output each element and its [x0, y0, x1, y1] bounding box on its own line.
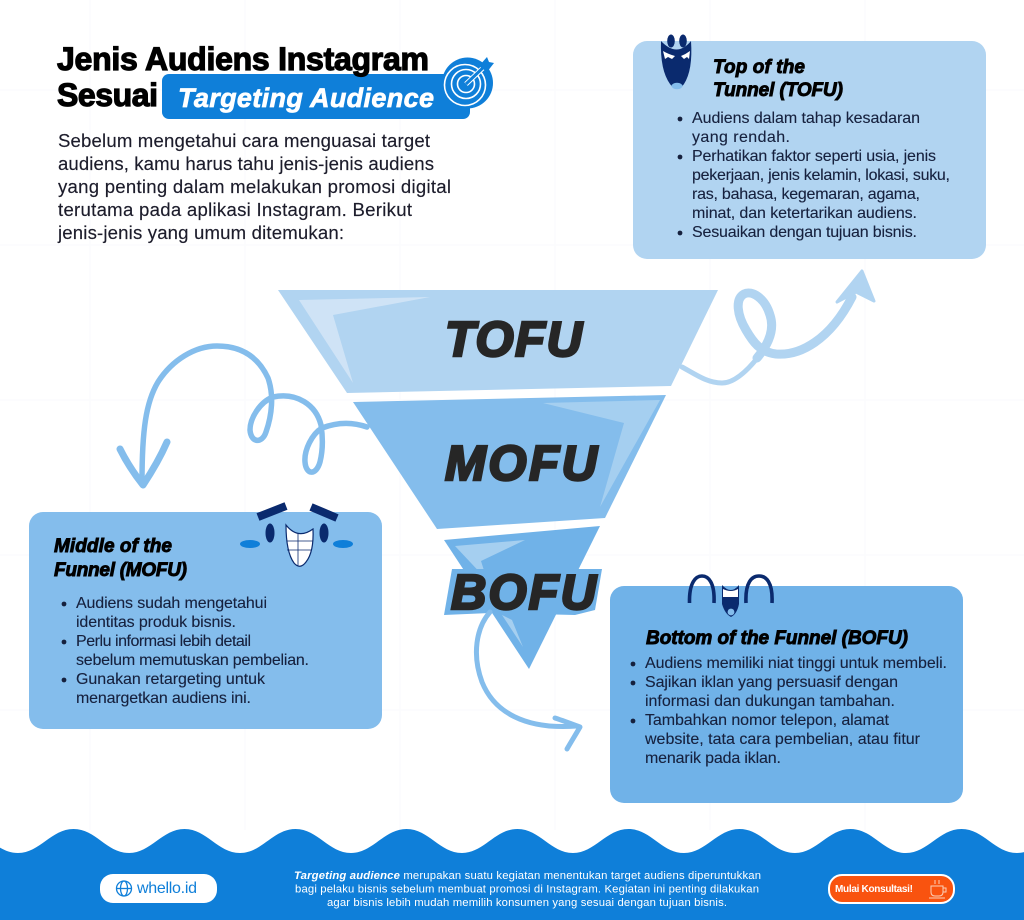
footer wave band: [0, 829, 1024, 920]
bullet list: TOFU: minat, dan ketertarikan audiens.: [692, 205, 917, 222]
bullet list: MOFU: Perlu informasi lebih detail: [76, 633, 251, 650]
bullet list: BOFU: website, tata cara pembelian, atau fitur: [644, 731, 921, 748]
title: Targeting Audience: [178, 83, 434, 113]
arrow: funnel to TOFU panel: [682, 271, 874, 383]
bullet list: MOFU: Gunakan retargeting untuk: [76, 671, 266, 688]
arrow: BOFU to BOFU panel: [476, 612, 580, 749]
bullet list: BOFU: informasi dan dukungan tambahan.: [645, 693, 895, 710]
intro text: audiens, kamu harus tahu jenis-jenis audiens: [58, 153, 434, 174]
bullet list: TOFU: Perhatikan faktor seperti usia, jenis: [692, 148, 936, 165]
icon: target with arrow: [442, 57, 494, 108]
bullet list: TOFU: yang rendah.: [692, 129, 790, 146]
intro text: yang penting dalam melakukan promosi digital: [58, 176, 451, 197]
arrow: funnel to MOFU panel: [120, 346, 367, 485]
bullet list: TOFU: ras, bahasa, kegemaran, agama,: [692, 186, 920, 203]
heading: TOFU: [713, 57, 843, 101]
heading: TOFU: Top of the: [713, 57, 805, 78]
panel: MOFU: [29, 512, 382, 729]
bullet list: TOFU: pekerjaan, jenis kelamin, lokasi, suku,: [692, 167, 950, 184]
call to action button: Mulai Konsultasi!: [835, 884, 913, 895]
bullet list: TOFU: Audiens dalam tahap kesadaran: [692, 110, 920, 127]
funnel segment: MOFU: MOFU: [445, 437, 599, 491]
bullet list: BOFU: menarik pada iklan.: [645, 750, 781, 767]
bullet list: BOFU: Sajikan iklan yang persuasif dengan: [645, 674, 898, 691]
panel: TOFU: [633, 41, 986, 259]
call to action button: [829, 875, 954, 903]
heading: MOFU: [54, 536, 187, 581]
funnel segment: BOFU: [444, 526, 602, 669]
icon: TOFU face: [661, 34, 691, 89]
bullet list: BOFU: Audiens memiliki niat tinggi untuk membeli.: [645, 655, 947, 672]
intro text: terutama pada aplikasi Instagram. Berikut: [58, 199, 413, 220]
bullet list: BOFU: [631, 655, 947, 767]
footer note: [294, 870, 761, 909]
intro text: Sebelum mengetahui cara menguasai target: [58, 130, 431, 151]
funnel: [278, 290, 718, 669]
heading: MOFU: Funnel (MOFU): [54, 560, 187, 581]
footer logo pill: [100, 874, 217, 903]
funnel segment: MOFU: [353, 395, 666, 529]
title: [57, 41, 470, 119]
bullet list: TOFU: Sesuaikan dengan tujuan bisnis.: [692, 224, 917, 241]
bullet list: MOFU: identitas produk bisnis.: [76, 614, 236, 631]
heading: MOFU: Middle of the: [54, 536, 172, 557]
bullet list: MOFU: Audiens sudah mengetahui: [76, 595, 267, 612]
funnel segment: TOFU: [278, 290, 718, 393]
footer note: bagi pelaku bisnis sebelum membuat promosi di Instagram. Kegiatan ini penting dilakukan: [295, 884, 759, 896]
bullet list: BOFU: Tambahkan nomor telepon, alamat: [645, 712, 890, 729]
heading: BOFU: Bottom of the Funnel (BOFU): [646, 628, 908, 649]
title: Sesuai: [57, 77, 158, 113]
heading: TOFU: Tunnel (TOFU): [713, 80, 843, 101]
title: Jenis Audiens Instagram: [57, 41, 429, 77]
bullet list: TOFU: [678, 110, 950, 241]
icon: BOFU face: [689, 576, 772, 617]
funnel segment: BOFU: BOFU: [451, 566, 598, 620]
icon: globe: [116, 881, 132, 896]
footer note: Targeting audience merupakan suatu kegiatan menentukan target audiens diperuntukkan: [294, 870, 761, 882]
intro text: jenis-jenis yang umum ditemukan:: [57, 222, 344, 243]
bullet list: MOFU: [62, 595, 309, 707]
panel: BOFU: [610, 586, 963, 803]
footer logo pill: whello.id: [136, 880, 197, 897]
funnel segment: TOFU: TOFU: [445, 313, 584, 367]
icon: MOFU face: [240, 506, 353, 566]
bullet list: MOFU: menargetkan audiens ini.: [76, 690, 251, 707]
icon: coffee cup: [929, 880, 946, 898]
intro text: [57, 130, 451, 243]
bullet list: MOFU: sebelum memutuskan pembelian.: [76, 652, 309, 669]
footer note: agar bisnis lebih mudah memilih konsumen yang sesuai dengan tujuan bisnis.: [327, 897, 727, 909]
title highlight pill: [162, 74, 470, 119]
